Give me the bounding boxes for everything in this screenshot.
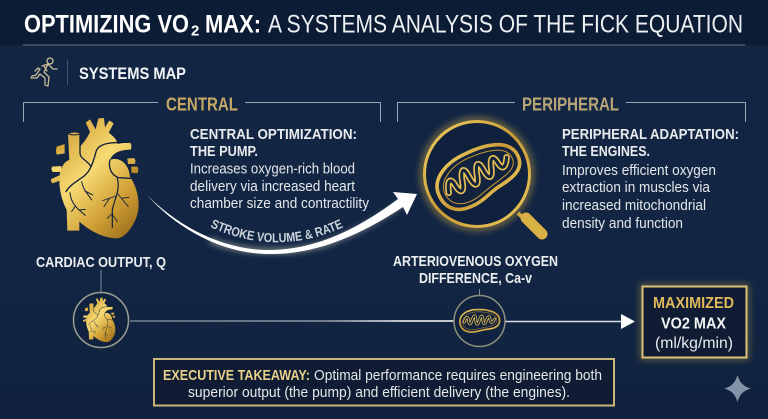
text block: central optimization (190, 126, 369, 212)
text block: peripheral adaptation: PERIPHERAL ADAPTATION: (562, 126, 739, 143)
label: arteriovenous oxygen difference: ARTERIOVENOUS OXYGEN (393, 253, 558, 270)
panel: central bracket (24, 94, 380, 122)
text block: peripheral adaptation (562, 126, 739, 232)
text block: peripheral adaptation: increased mitochondrial (562, 197, 706, 214)
flow line with arrow (130, 314, 635, 329)
text block: central optimization: CENTRAL OPTIMIZATION: (190, 126, 357, 143)
label: arteriovenous oxygen difference (393, 253, 558, 287)
section heading: systems map (31, 58, 186, 86)
callout: executive takeaway: superior output (the pump) and efficient delivery (the engines). (188, 384, 570, 401)
label: cardiac output: CARDIAC OUTPUT, Q (36, 254, 166, 271)
callout: maximized vo2 max: (ml/kg/min) (655, 335, 733, 352)
text block: central optimization: delivery via increased heart (190, 178, 356, 195)
title: OPTIMIZING VO (24, 10, 189, 38)
node: small mitochondrion (454, 289, 505, 346)
title band (0, 0, 768, 45)
panel: peripheral bracket (398, 94, 746, 122)
arrow: stroke volume and rate curve (147, 192, 417, 258)
text block: peripheral adaptation: density and function (562, 215, 683, 232)
icon: sparkle (724, 375, 751, 402)
icon: magnifier with mitochondrion (423, 120, 542, 234)
section heading: systems map: SYSTEMS MAP (79, 64, 186, 83)
text block: peripheral adaptation: THE ENGINES. (562, 143, 650, 160)
callout: executive takeaway: EXECUTIVE TAKEAWAY: (163, 367, 310, 384)
text block: central optimization: THE PUMP. (190, 143, 258, 160)
title (24, 10, 743, 40)
text block: central optimization: Increases oxygen-rich blood (190, 160, 355, 178)
callout: maximized vo2 max: MAXIMIZED (653, 295, 734, 312)
panel: central bracket: CENTRAL (166, 94, 238, 114)
label: arteriovenous oxygen difference: DIFFERENCE, Ca-v (419, 270, 533, 287)
callout: maximized vo2 max (642, 286, 747, 358)
callout: executive takeaway (154, 359, 614, 406)
icon: large golden heart (51, 118, 139, 238)
title: MAX: (205, 10, 261, 38)
callout: executive takeaway: Optimal performance requires engineering both (314, 367, 602, 384)
text block: peripheral adaptation: Improves efficient oxygen (562, 162, 716, 179)
text block: central optimization: chamber size and contractility (190, 195, 369, 212)
text block: peripheral adaptation: extraction in muscles via (562, 179, 711, 196)
icon: runner (31, 58, 57, 86)
node: small heart (74, 270, 128, 348)
arrow label: STROKE VOLUME & RATE (211, 219, 344, 242)
panel: peripheral bracket: PERIPHERAL (522, 94, 619, 114)
title: 2 (191, 22, 199, 40)
callout: maximized vo2 max: VO2 MAX (661, 316, 726, 332)
